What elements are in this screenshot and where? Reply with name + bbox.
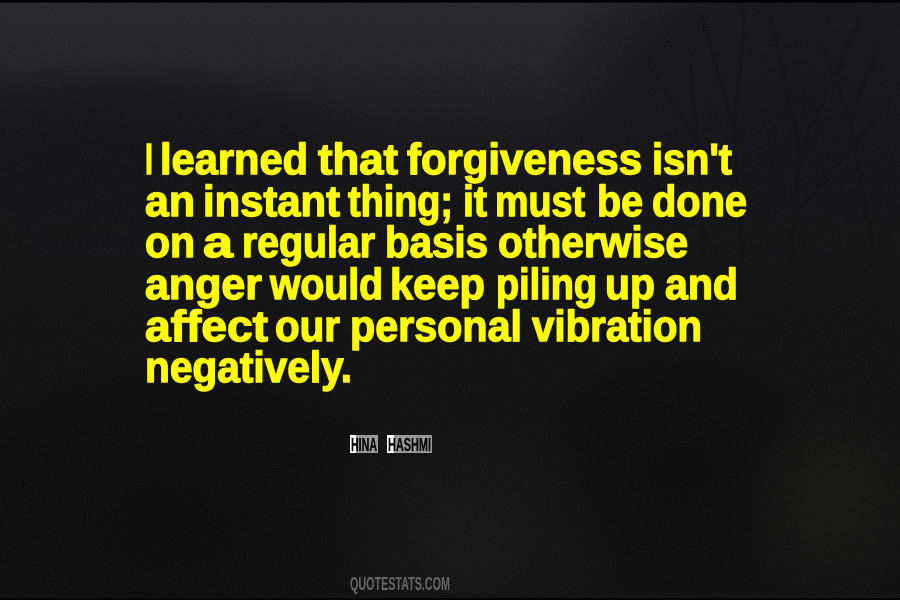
author name: HINA: [351, 435, 377, 455]
quote line 3: [145, 218, 688, 267]
quote line 5: affect: [145, 302, 268, 351]
quote line 1: isn't: [652, 135, 732, 184]
quote line 1: learned: [160, 135, 308, 184]
quote line 1: forgiveness: [407, 135, 642, 184]
quote line 3: a: [203, 218, 234, 267]
watermark: QUOTESTATS.COM: [350, 574, 450, 594]
quote line 4: and: [665, 260, 738, 309]
quote line 4: [145, 260, 738, 309]
quote line 5: our: [275, 302, 340, 351]
quote line 4: up: [605, 260, 655, 309]
quote line 4: piling: [496, 260, 597, 309]
quote line 2: [145, 177, 747, 226]
quote line 5: personal: [350, 302, 522, 351]
quote line 3: otherwise: [498, 218, 688, 267]
quote line 2: must: [495, 177, 585, 226]
quote line 5: [145, 302, 702, 351]
author name: HASHMI: [388, 435, 431, 455]
quote line 1: I: [145, 135, 153, 184]
quote line 1: that: [318, 135, 398, 184]
quote line 4: would: [269, 260, 383, 309]
quote line 2: an: [145, 177, 195, 226]
quote line 5: vibration: [532, 302, 702, 351]
author name: [350, 435, 432, 455]
quote line 6: negatively.: [145, 343, 352, 392]
quote line 2: instant: [203, 177, 340, 226]
quote line 3: basis: [385, 218, 488, 267]
quote line 1: [145, 135, 732, 184]
quote line 4: keep: [390, 260, 485, 309]
quote line 3: on: [145, 218, 195, 267]
quote line 4: anger: [145, 260, 262, 309]
quote text: [145, 135, 747, 392]
quote line 3: regular: [242, 218, 375, 267]
quote line 2: it: [463, 177, 487, 226]
quote line 2: be: [597, 177, 643, 226]
quote line 2: done: [652, 177, 747, 226]
quote line 2: thing;: [348, 177, 453, 226]
